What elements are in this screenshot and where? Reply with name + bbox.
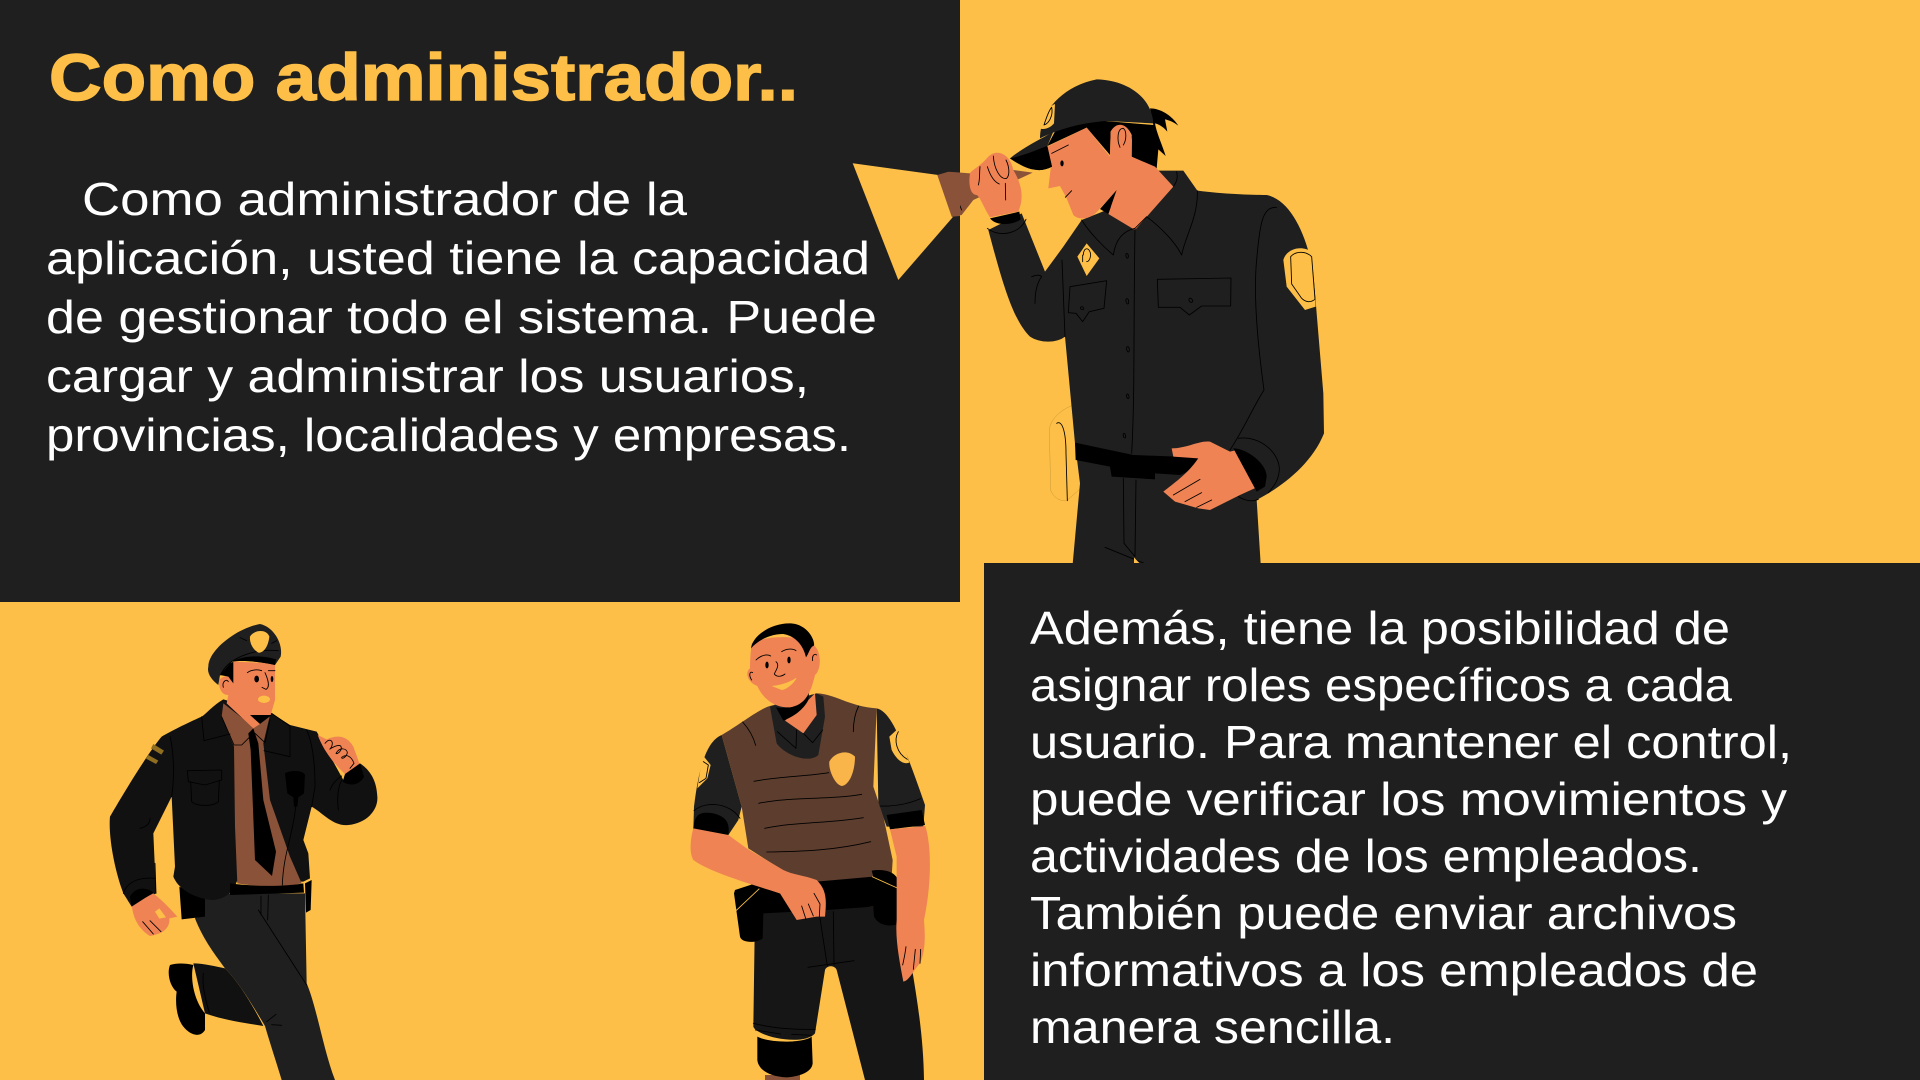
sleeve patches bbox=[697, 755, 711, 788]
neck bbox=[785, 693, 817, 733]
belt bbox=[1075, 443, 1198, 479]
text block: roles paragraph: informativos a los empleados de bbox=[1030, 944, 1758, 996]
holster outline bbox=[1049, 405, 1081, 501]
vest bbox=[722, 693, 893, 883]
right sleeve bbox=[877, 708, 925, 827]
text block: roles paragraph: Además, tiene la posibilidad de bbox=[1030, 602, 1730, 654]
shirt bbox=[222, 703, 302, 886]
trousers bbox=[753, 907, 924, 1080]
text block: intro paragraph: Como administrador de la bbox=[82, 173, 687, 225]
text block: roles paragraph: usuario. Para mantener el control, bbox=[1030, 716, 1792, 768]
cuffs bbox=[693, 813, 729, 835]
text block: intro paragraph: provincias, localidades y empresas. bbox=[46, 409, 851, 461]
shirt pockets bbox=[1068, 278, 1231, 322]
text block: roles paragraph: actividades de los empleados. bbox=[1030, 830, 1702, 882]
head bbox=[219, 662, 275, 728]
rear leg bbox=[193, 963, 263, 1026]
text block: roles paragraph: puede verificar los movimientos y bbox=[1030, 773, 1787, 825]
figure: officer with vest bbox=[691, 623, 930, 1080]
flashlight bbox=[937, 170, 1033, 217]
panel: bottom right dark bbox=[984, 563, 1920, 1080]
face and neck bbox=[1047, 125, 1173, 230]
collar bbox=[770, 693, 825, 759]
cap bbox=[1040, 79, 1153, 138]
facial features bbox=[750, 649, 817, 680]
uniform body bbox=[988, 171, 1324, 564]
text block: intro paragraph: aplicación, usted tiene la capacidad bbox=[46, 232, 870, 284]
shoulder patch bbox=[1283, 248, 1316, 310]
flashlight head over panel bbox=[937, 172, 960, 217]
facial features bbox=[223, 670, 275, 689]
sleeve lines bbox=[694, 799, 921, 818]
hair bbox=[751, 623, 814, 657]
head bbox=[747, 637, 820, 707]
mouth bbox=[772, 678, 797, 690]
trouser lines bbox=[1105, 478, 1148, 565]
knee pad bbox=[757, 1037, 813, 1077]
text block: roles paragraph: asignar roles específicos a cada bbox=[1030, 659, 1732, 711]
lower leg bbox=[765, 1075, 800, 1080]
text block: roles paragraph: manera sencilla. bbox=[1030, 1001, 1395, 1053]
text block: intro paragraph: de gestionar todo el sistema. Puede bbox=[46, 291, 877, 343]
radio microphone bbox=[285, 771, 305, 807]
waist cuff bbox=[1233, 448, 1267, 492]
figure: officer with flashlight bbox=[853, 79, 1324, 565]
hair bbox=[220, 662, 233, 683]
flashlight beam bbox=[853, 163, 953, 280]
left cuff bbox=[130, 889, 153, 907]
title: Como administrador.. bbox=[49, 40, 798, 114]
shirt buttons bbox=[1123, 253, 1129, 438]
text block: intro paragraph: cargar y administrar los usuarios, bbox=[46, 350, 809, 402]
gap between legs bbox=[1134, 557, 1139, 563]
jacket bbox=[110, 699, 377, 907]
vest badge bbox=[829, 752, 855, 786]
mouth bbox=[258, 696, 270, 703]
sleeve stripes bbox=[146, 744, 164, 764]
trouser lines bbox=[753, 912, 854, 1035]
fist bbox=[318, 735, 360, 774]
belt and pouches bbox=[734, 870, 902, 942]
figure: running officer bbox=[110, 624, 377, 1080]
cap badge bbox=[250, 631, 269, 653]
chest badge bbox=[1077, 243, 1099, 276]
waist hand bbox=[1163, 441, 1258, 510]
jacket tails bbox=[179, 880, 312, 919]
right cuff bbox=[343, 763, 364, 784]
beam over panel bbox=[853, 163, 953, 280]
trouser lines bbox=[203, 895, 307, 1025]
police cap bbox=[208, 624, 281, 685]
left hand bbox=[132, 893, 177, 936]
hair bbox=[1047, 108, 1178, 168]
vest lines bbox=[743, 706, 871, 852]
jacket lines bbox=[123, 713, 342, 893]
waistband bbox=[230, 883, 304, 895]
raised hand bbox=[969, 153, 1022, 217]
trousers bbox=[195, 893, 335, 1080]
tie bbox=[248, 728, 276, 876]
shoe bbox=[169, 963, 205, 1035]
text block: roles paragraph: También puede enviar archivos bbox=[1030, 887, 1737, 939]
raised cuff bbox=[990, 212, 1021, 224]
left arm bbox=[691, 828, 826, 920]
panel: top left dark bbox=[0, 0, 960, 602]
shirt details bbox=[1032, 172, 1279, 501]
jacket pocket bbox=[187, 770, 222, 805]
holster detail bbox=[1057, 423, 1067, 501]
facial details bbox=[1052, 128, 1126, 197]
left sleeve bbox=[693, 735, 742, 835]
text block: roles paragraph bbox=[1030, 602, 1792, 1053]
right arm bbox=[890, 826, 930, 982]
text block: intro paragraph bbox=[46, 173, 877, 461]
